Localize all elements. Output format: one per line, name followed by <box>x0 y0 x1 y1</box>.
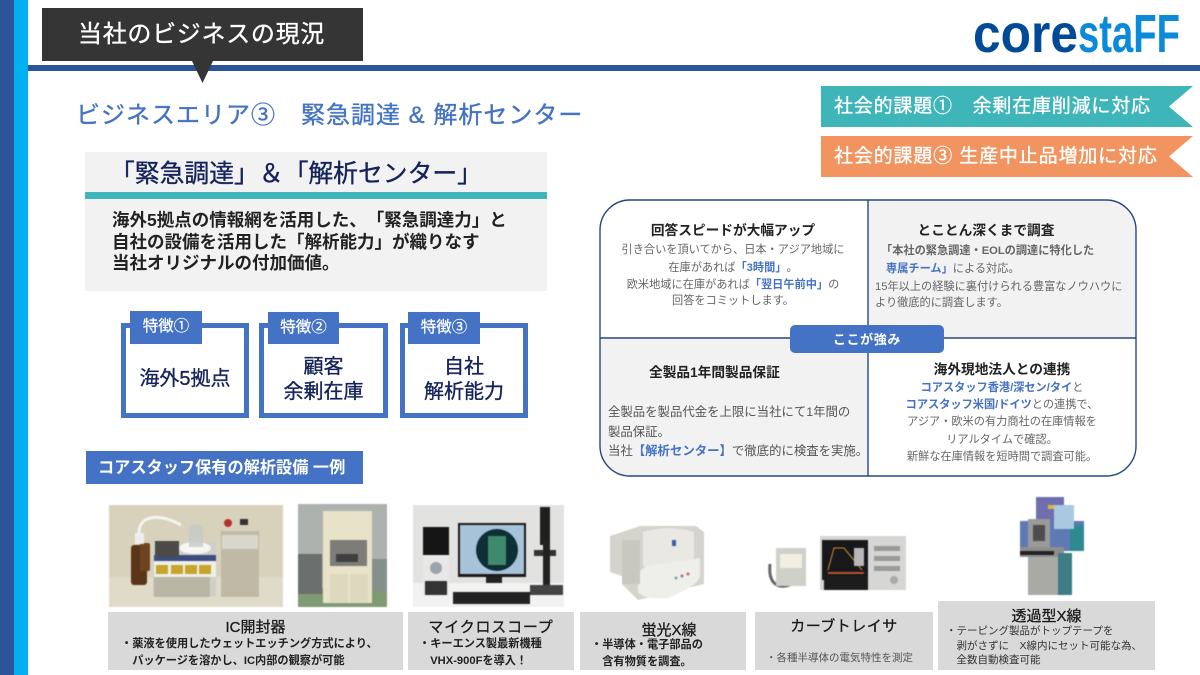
caption: curve tracer <box>755 612 933 670</box>
quadrant: deep research <box>875 223 1122 309</box>
banner: issue 3: 社会的課題③ 生産中止品増加に対応 <box>834 146 1158 167</box>
caption: IC decapsulator: ・薬液を使用したウェットエッチング方式により、 <box>121 638 378 650</box>
quadrant: overseas: 海外現地法人との連携 <box>934 362 1070 377</box>
caption: XRF: 蛍光X線 <box>641 622 696 639</box>
quadrant: overseas: コアスタッフ香港/深セン/タイと <box>921 382 1083 394</box>
panel: intro <box>85 152 547 291</box>
matrix frame <box>599 199 1137 477</box>
caption: microscope: VHX-900Fを導入！ <box>430 654 527 666</box>
feature 3: 解析能力 <box>424 381 504 403</box>
panel body text <box>112 210 507 273</box>
caption: IC decapsulator <box>108 612 403 670</box>
feature 3: 特徴③ <box>421 319 467 336</box>
caption: IC decapsulator: IC開封器 <box>225 619 286 636</box>
caption: curve tracer: ・各種半導体の電気特性を測定 <box>766 652 913 664</box>
photo: curve tracer <box>768 536 906 591</box>
photo: transmission X-ray <box>1019 496 1085 596</box>
feature 2: 顧客 <box>304 356 344 378</box>
quadrant: warranty: 全製品1年間製品保証 <box>649 365 780 380</box>
banner: issue 1: 社会的課題① 余剰在庫削減に対応 <box>834 96 1151 117</box>
quadrant: warranty <box>608 365 868 458</box>
quadrant: response speed: 回答スピードが大幅アップ <box>651 223 815 238</box>
quadrant: deep research: とことん深くまで調査 <box>918 223 1054 238</box>
feature 1 <box>121 311 249 418</box>
quadrant: deep research: より徹底的に調査します。 <box>875 297 1008 309</box>
quadrant: response speed: 回答をコミットします。 <box>672 295 794 307</box>
caption: transmission X-ray: 剥がさずに X線内にセット可能な為、 <box>956 640 1142 652</box>
title text: 当社のビジネスの現況 <box>78 21 325 48</box>
quadrant: overseas <box>906 362 1098 463</box>
header rule <box>28 65 1200 71</box>
feature 2 <box>259 312 388 418</box>
quadrant: response speed: 引き合いを頂いてから、日本・アジア地域に <box>622 244 844 256</box>
equipment label <box>86 451 363 484</box>
caption: curve tracer: カーブトレイサ <box>790 618 898 635</box>
caption: microscope: ・キーエンス製最新機種 <box>419 638 542 650</box>
feature 2: 特徴② <box>280 319 327 336</box>
panel body text: 自社の設備を活用した「解析能力」が織りなす <box>112 232 480 252</box>
photo: IC decapsulator <box>108 504 284 608</box>
panel heading: 「緊急調達」＆「解析センター」 <box>110 161 482 188</box>
quadrant: overseas: コアスタッフ米国/ドイツとの連携で、 <box>906 399 1098 411</box>
feature 3 <box>400 312 528 418</box>
quadrant: deep research: 専属チーム」による対応。 <box>886 263 1020 275</box>
feature 3: 自社 <box>444 356 484 378</box>
quadrant: overseas: 新鮮な在庫情報を短時間で調査可能。 <box>907 451 1097 463</box>
quadrant: response speed: 在庫があれば「3時間」。 <box>668 262 798 274</box>
strengths matrix <box>599 199 1137 477</box>
quadrant: deep research: 「本社の緊急調達・EOLの調達に特化した <box>881 245 1094 257</box>
left accent bars <box>0 0 28 675</box>
caption: transmission X-ray <box>938 601 1155 670</box>
feature 2: 余剰在庫 <box>284 381 364 403</box>
strength badge <box>790 325 944 353</box>
panel body text: 当社オリジナルの付加価値。 <box>112 253 340 273</box>
caption: XRF: ・半導体・電子部品の <box>591 639 703 651</box>
caption: IC decapsulator: パッケージを溶かし、IC内部の観察が可能 <box>132 654 345 666</box>
strength badge: ここが強み <box>833 332 901 347</box>
caption: transmission X-ray: 透過型X線 <box>1011 608 1082 625</box>
feature 1: 特徴① <box>143 318 189 335</box>
photo: XRF instrument <box>610 526 704 600</box>
logo <box>973 8 1180 58</box>
quadrant: warranty: 製品保証。 <box>608 424 670 438</box>
quadrant: warranty: 全製品を製品代金を上限に当社にて1年間の <box>608 405 850 419</box>
quadrant: warranty: 当社【解析センター】で徹底的に検査を実施。 <box>608 444 868 458</box>
panel body text: 海外5拠点の情報網を活用した、「緊急調達力」と <box>112 210 507 230</box>
caption: XRF: 含有物質を調査。 <box>602 656 692 668</box>
caption: transmission X-ray: 全数自動検査可能 <box>956 654 1040 666</box>
quadrant: response speed <box>622 223 844 307</box>
quadrant: deep research: 15年以上の経験に裏付けられる豊富なノウハウに <box>875 281 1122 293</box>
caption: XRF <box>580 612 746 670</box>
quadrant: response speed: 欧米地域に在庫があれば「翌日午前中」の <box>627 279 839 291</box>
section heading: ビジネスエリア③ 緊急調達 & 解析センター <box>76 102 583 129</box>
equipment label: コアスタッフ保有の解析設備 一例 <box>98 459 345 477</box>
quadrant: overseas: アジア・欧米の有力商社の在庫情報を <box>907 416 1097 428</box>
quadrant: overseas: リアルタイムで確認。 <box>946 434 1058 446</box>
photo: fume hood <box>297 504 388 608</box>
caption: microscope <box>408 612 574 670</box>
title tag <box>42 8 363 83</box>
photo: microscope <box>412 504 564 607</box>
feature 1: 海外5拠点 <box>139 368 231 390</box>
banner: issue 3 <box>821 136 1193 177</box>
banner: issue 1 <box>821 86 1193 127</box>
caption: microscope: マイクロスコープ <box>428 619 554 636</box>
caption: transmission X-ray: ・テーピング製品がトップテープを <box>946 625 1113 637</box>
